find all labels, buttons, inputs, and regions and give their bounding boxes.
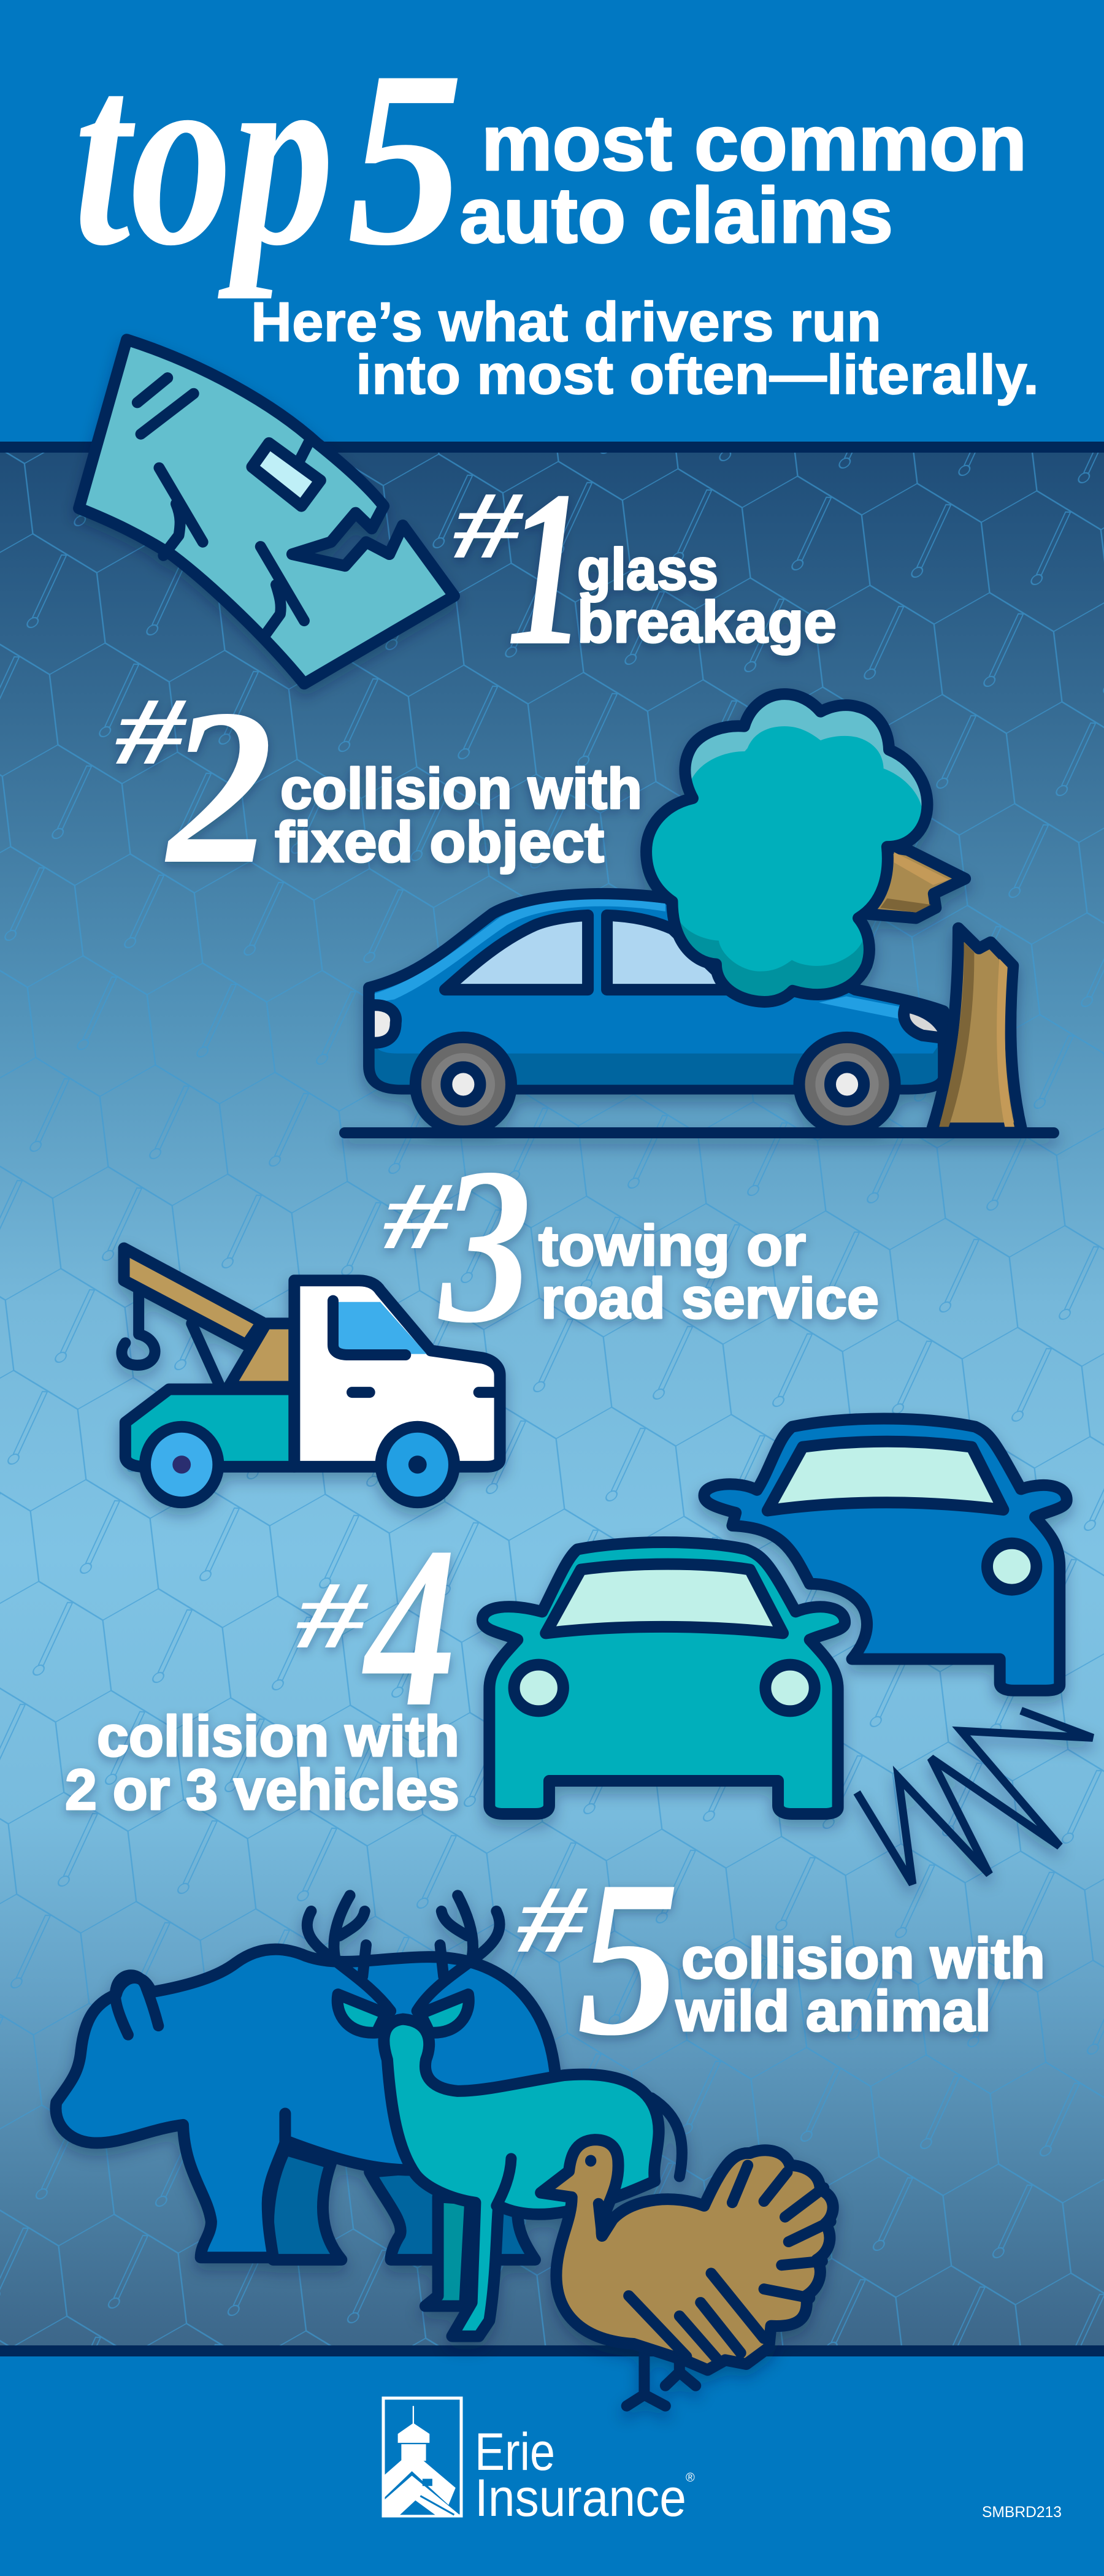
heading: #5 collision with wild animal: collision with (681, 1926, 1045, 1990)
code: SMBRD213: SMBRD213 (982, 2504, 1062, 2521)
heading: #5 collision with wild animal (517, 1834, 1045, 2082)
broken tree branch (868, 847, 965, 918)
icon: broken windshield (79, 340, 454, 684)
broken tree trunk (932, 928, 1021, 1129)
heading: #1 glass breakage: glass (577, 537, 718, 602)
title (74, 10, 1027, 300)
heading: #2 collision with fixed object: collision with (280, 756, 642, 821)
patterned gradient background (0, 452, 1104, 2347)
title: auto claims (459, 172, 893, 259)
icon: blue car (704, 1419, 1067, 1690)
heading: #3 towing or road service: 3 (437, 1122, 532, 1369)
heading: #4 collision with 2 or 3 vehicles (65, 1500, 459, 1822)
heading: #1 glass breakage (453, 445, 837, 692)
heading: #5 collision with wild animal: 5 (577, 1834, 680, 2082)
subtitle (251, 291, 1039, 406)
logo wordmark: Insurance (475, 2469, 686, 2528)
car wheels (415, 1037, 895, 1132)
heading: #3 towing or road service: # (383, 1162, 454, 1269)
icon: car hitting tree (345, 694, 1054, 1133)
heading: #2 collision with fixed object (115, 663, 642, 910)
title: top (74, 10, 334, 300)
heading: #4 collision with 2 or 3 vehicles: 4 (362, 1500, 456, 1755)
header band (0, 0, 1104, 443)
subtitle: into most often—literally. (356, 344, 1039, 406)
truck bed (125, 1389, 294, 1466)
bottom divider (0, 2345, 1104, 2356)
logo: Erie Insurance (383, 2398, 695, 2528)
heading: #2 collision with fixed object: fixed object (275, 810, 604, 874)
truck wheels (145, 1427, 454, 1503)
heading: #5 collision with wild animal: wild animal (675, 1979, 991, 2043)
heading: #1 glass breakage: # (453, 472, 524, 578)
title: most common (481, 99, 1027, 187)
logo building icon (383, 2398, 461, 2516)
truck cab (294, 1281, 500, 1466)
icon: crash spark (857, 1711, 1093, 1884)
heading: #5 collision with wild animal: # (517, 1866, 589, 1972)
heading: #3 towing or road service (383, 1122, 879, 1369)
icon: bear, deer and turkey (56, 1895, 833, 2406)
icon: teal car (482, 1543, 845, 1814)
heading: #4 collision with 2 or 3 vehicles: # (296, 1562, 369, 1668)
logo wordmark: Erie (475, 2423, 555, 2482)
title: 5 (347, 19, 464, 297)
subtitle: Here’s what drivers run (251, 291, 881, 353)
car body (369, 894, 947, 1089)
tree crown (646, 694, 927, 1002)
heading: #4 collision with 2 or 3 vehicles: collision with (97, 1704, 459, 1768)
top divider (0, 442, 1104, 453)
heading: #3 towing or road service: towing or (539, 1213, 806, 1278)
icon: tow truck (121, 1248, 500, 1503)
ground line (345, 1127, 1054, 1138)
heading: #1 glass breakage: breakage (577, 589, 837, 655)
heading: #3 towing or road service: road service (541, 1266, 879, 1330)
logo wordmark: ® (686, 2471, 695, 2485)
logo wordmark (475, 2423, 695, 2528)
deer (307, 1895, 682, 2336)
bear (56, 1949, 556, 2260)
tow boom (121, 1248, 294, 1387)
heading: #4 collision with 2 or 3 vehicles: 2 or 3 vehicles (65, 1757, 459, 1822)
heading: #2 collision with fixed object: 2 (164, 663, 273, 910)
turkey (541, 2140, 833, 2406)
footer band (0, 2356, 1104, 2576)
heading: #2 collision with fixed object: # (115, 678, 188, 784)
heading: #1 glass breakage: 1 (507, 445, 586, 692)
